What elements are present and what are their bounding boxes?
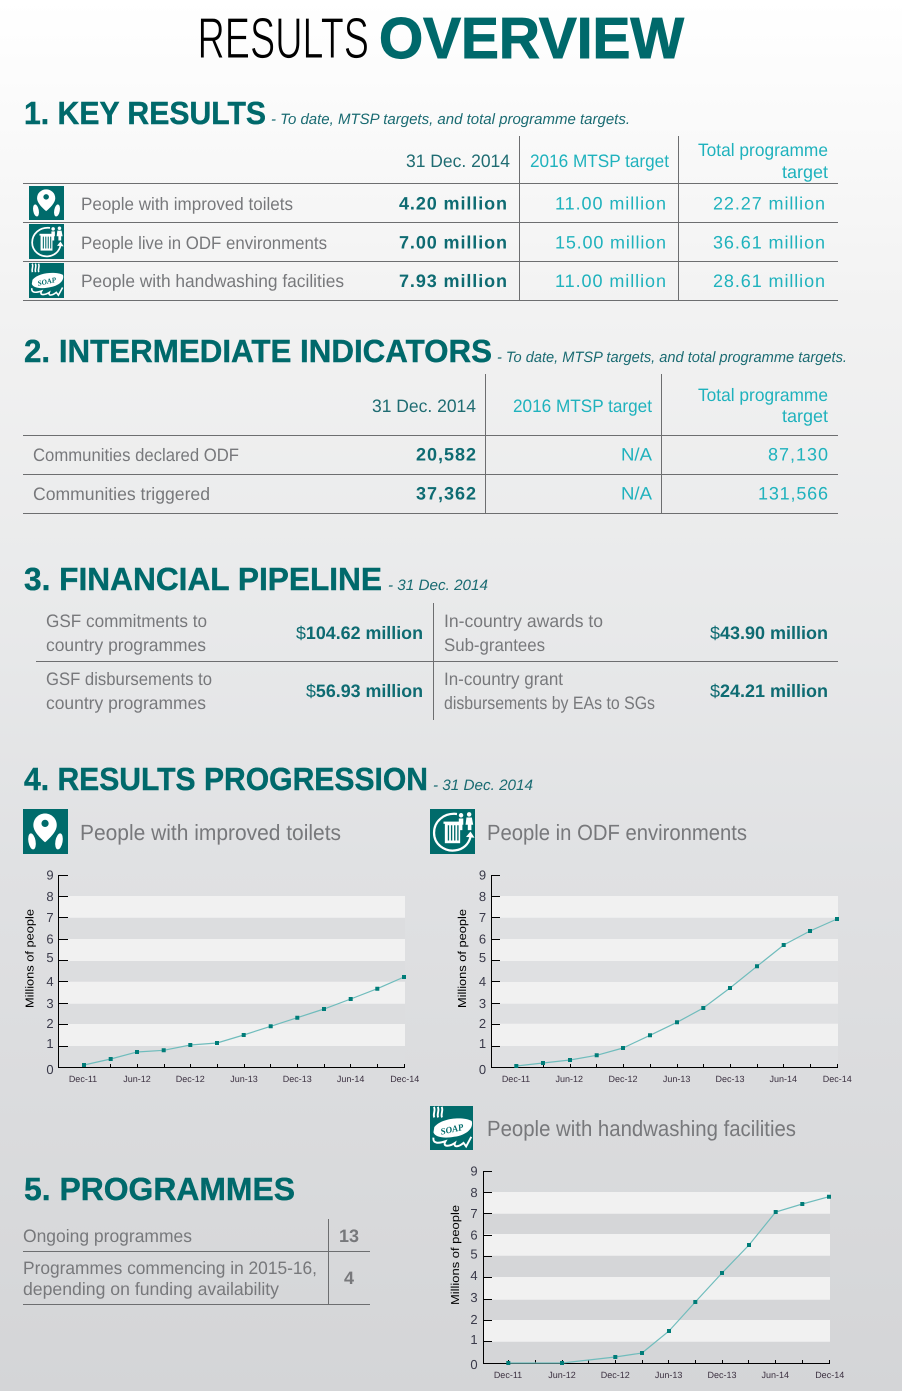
table: key results: 11.00 million xyxy=(555,194,666,214)
line chart: improved toilets: Jun-13 xyxy=(230,1074,258,1084)
line chart: ODF environments: Dec-12 xyxy=(608,1074,638,1084)
line chart: handwashing facilities: Dec-14 xyxy=(815,1370,844,1380)
icon: ODF environments xyxy=(430,809,475,854)
icon: ODF environments xyxy=(29,224,64,259)
panel: improved toilets chart xyxy=(23,809,419,1084)
line chart: ODF environments: Dec-14 xyxy=(823,1074,852,1084)
subheading: intermediate indicators: - To date, MTSP targets, and total programme targets. xyxy=(497,349,847,366)
line chart: handwashing facilities: Jun-14 xyxy=(762,1370,789,1380)
line chart: improved toilets: Dec-13 xyxy=(283,1074,312,1084)
table: financial pipeline xyxy=(36,603,838,720)
table: key results: 7.00 million xyxy=(399,232,507,252)
line chart: handwashing facilities: 6 xyxy=(470,1228,478,1242)
line chart: handwashing facilities: 0 xyxy=(470,1357,478,1372)
table: programmes xyxy=(23,1219,370,1304)
icon: handwashing facilities: SOAP xyxy=(37,275,57,288)
table: key results xyxy=(23,136,838,300)
heading: intermediate indicators: 2. INTERMEDIATE INDICATORS xyxy=(24,333,492,369)
line chart: handwashing facilities: 2 xyxy=(470,1312,478,1327)
table: key results: 15.00 million xyxy=(555,232,666,252)
table: intermediate indicators: 31 Dec. 2014 xyxy=(372,396,476,416)
table: financial pipeline: $24.21 million xyxy=(710,681,828,701)
table: intermediate indicators: target xyxy=(782,406,828,426)
table: key results: 22.27 million xyxy=(713,194,825,214)
table: intermediate indicators: Total programme xyxy=(698,385,828,405)
table: key results: 31 Dec. 2014 xyxy=(406,151,510,171)
table: key results: 2016 MTSP target xyxy=(530,151,669,171)
subheading: financial pipeline: - 31 Dec. 2014 xyxy=(388,577,488,594)
line chart: improved toilets: 0 xyxy=(46,1062,54,1077)
line chart: handwashing facilities: Jun-13 xyxy=(655,1370,682,1380)
heading: programmes: 5. PROGRAMMES xyxy=(24,1171,295,1207)
line chart: improved toilets: 5 xyxy=(46,950,54,965)
line chart: ODF environments: 9 xyxy=(479,868,486,882)
table: financial pipeline: disbursements by EAs to SGs xyxy=(444,693,655,713)
table: intermediate indicators: Communities declared ODF xyxy=(33,445,239,465)
line chart: improved toilets: 7 xyxy=(46,910,54,925)
section 3: financial pipeline xyxy=(24,561,838,720)
table: key results: 36.61 million xyxy=(713,232,825,252)
line chart: handwashing facilities: 4 xyxy=(470,1268,478,1283)
table: financial pipeline: $43.90 million xyxy=(710,623,828,643)
line chart: ODF environments: 6 xyxy=(479,932,486,946)
table: financial pipeline: $56.93 million xyxy=(306,681,423,701)
line chart: improved toilets: 4 xyxy=(46,974,54,989)
line chart: improved toilets: Dec-11 xyxy=(69,1074,97,1084)
line chart: ODF environments: 7 xyxy=(479,910,486,925)
line chart: improved toilets: Jun-12 xyxy=(123,1074,151,1084)
line chart: ODF environments: 3 xyxy=(479,996,486,1011)
line chart: ODF environments: 8 xyxy=(479,889,486,904)
line chart: handwashing facilities: 9 xyxy=(470,1164,478,1178)
line chart: improved toilets: Millions of people xyxy=(24,909,36,1008)
table: key results: 28.61 million xyxy=(713,271,825,291)
table: intermediate indicators: 87,130 xyxy=(768,444,828,464)
table: intermediate indicators xyxy=(23,374,838,514)
line chart: handwashing facilities xyxy=(450,1164,844,1380)
line chart: handwashing facilities: Millions of people xyxy=(450,1205,462,1305)
line chart: ODF environments: Jun-14 xyxy=(770,1074,797,1084)
panel: ODF environments chart xyxy=(430,809,852,1084)
heading: financial pipeline: 3. FINANCIAL PIPELINE xyxy=(24,561,382,597)
line chart: ODF environments: Millions of people xyxy=(457,909,469,1008)
table: programmes: Programmes commencing in 2015-16, xyxy=(23,1258,317,1278)
line chart: ODF environments: Jun-13 xyxy=(663,1074,690,1084)
line chart: improved toilets: 3 xyxy=(46,996,54,1011)
table: financial pipeline: country programmes xyxy=(46,635,206,655)
line chart: improved toilets: 2 xyxy=(46,1016,54,1031)
line chart: improved toilets: 8 xyxy=(46,889,54,904)
panel: handwashing facilities chart xyxy=(430,1106,844,1380)
icon: handwashing facilities xyxy=(430,1106,473,1150)
table: key results: Total programme xyxy=(698,140,828,160)
line chart: improved toilets: 6 xyxy=(46,932,54,946)
table: key results: People live in ODF environments xyxy=(81,233,327,253)
table: programmes: depending on funding availability xyxy=(23,1279,279,1299)
line chart: handwashing facilities: 5 xyxy=(470,1246,478,1262)
line chart: ODF environments: 5 xyxy=(479,950,486,965)
line chart: improved toilets: Jun-14 xyxy=(337,1074,364,1084)
chart title: ODF environments: People in ODF environments xyxy=(487,820,747,845)
table: financial pipeline: Sub-grantees xyxy=(444,635,545,655)
table: programmes: 13 xyxy=(339,1226,359,1246)
table: intermediate indicators: Communities triggered xyxy=(33,484,210,504)
table: key results: People with handwashing facilities xyxy=(81,271,344,291)
line chart: ODF environments: Dec-11 xyxy=(502,1074,530,1084)
table: intermediate indicators: N/A xyxy=(621,444,652,464)
subheading: results progression: - 31 Dec. 2014 xyxy=(433,777,533,794)
heading: key results: 1. KEY RESULTS xyxy=(24,95,266,131)
table: key results: target xyxy=(782,162,828,182)
line chart: handwashing facilities: Dec-12 xyxy=(601,1370,630,1380)
icon: handwashing facilities: SOAP xyxy=(440,1122,464,1137)
table: key results: People with improved toilets xyxy=(81,194,293,214)
line chart: ODF environments xyxy=(457,868,852,1084)
title: RESULTS xyxy=(198,6,369,71)
line chart: improved toilets xyxy=(24,868,419,1084)
table: intermediate indicators: N/A xyxy=(621,484,652,504)
subheading: key results: - To date, MTSP targets, and total programme targets. xyxy=(271,111,630,128)
section 1: key results xyxy=(23,95,838,300)
table: financial pipeline: GSF disbursements to xyxy=(46,669,212,689)
table: programmes: Ongoing programmes xyxy=(23,1226,192,1246)
line chart: handwashing facilities: Jun-12 xyxy=(548,1370,576,1380)
line chart: handwashing facilities: 8 xyxy=(470,1185,478,1200)
icon: improved toilets xyxy=(23,809,68,854)
line chart: handwashing facilities: Dec-13 xyxy=(707,1370,737,1380)
icon: improved toilets xyxy=(29,186,64,220)
icon: handwashing facilities xyxy=(29,263,64,298)
line chart: improved toilets: 1 xyxy=(46,1036,54,1051)
section 2: intermediate indicators xyxy=(23,333,847,514)
section 5: programmes xyxy=(23,1171,370,1304)
line chart: improved toilets: Dec-14 xyxy=(390,1074,419,1084)
table: programmes: 4 xyxy=(344,1268,354,1288)
table: financial pipeline: country programmes xyxy=(46,693,206,713)
line chart: ODF environments: Dec-13 xyxy=(715,1074,745,1084)
table: intermediate indicators: 2016 MTSP target xyxy=(513,396,652,416)
line chart: handwashing facilities: 3 xyxy=(470,1290,478,1305)
table: intermediate indicators: 131,566 xyxy=(758,484,828,504)
chart title: improved toilets: People with improved toilets xyxy=(80,820,341,845)
line chart: handwashing facilities: 1 xyxy=(470,1332,478,1347)
table: financial pipeline: In-country awards to xyxy=(444,611,603,631)
title: OVERVIEW xyxy=(379,6,684,71)
table: key results: 7.93 million xyxy=(399,271,507,291)
line chart: handwashing facilities: 7 xyxy=(470,1206,478,1221)
line chart: ODF environments: Jun-12 xyxy=(556,1074,583,1084)
line chart: handwashing facilities: Dec-11 xyxy=(494,1370,522,1380)
title xyxy=(198,6,684,71)
section 4: results progression xyxy=(23,761,852,1380)
table: financial pipeline: GSF commitments to xyxy=(46,611,207,631)
chart title: handwashing facilities: People with handwashing facilities xyxy=(487,1116,796,1141)
table: financial pipeline: $104.62 million xyxy=(296,623,423,643)
table: key results: 11.00 million xyxy=(555,271,666,291)
line chart: improved toilets: Dec-12 xyxy=(176,1074,205,1084)
heading: results progression: 4. RESULTS PROGRESSION xyxy=(24,761,428,797)
table: financial pipeline: In-country grant xyxy=(444,669,563,689)
line chart: ODF environments: 0 xyxy=(479,1062,486,1077)
line chart: ODF environments: 4 xyxy=(479,974,486,989)
table: key results: 4.20 million xyxy=(399,194,507,214)
line chart: improved toilets: 9 xyxy=(46,868,54,882)
table: intermediate indicators: 20,582 xyxy=(416,444,476,464)
line chart: ODF environments: 1 xyxy=(479,1036,486,1051)
line chart: ODF environments: 2 xyxy=(479,1016,486,1031)
table: intermediate indicators: 37,362 xyxy=(416,484,476,504)
